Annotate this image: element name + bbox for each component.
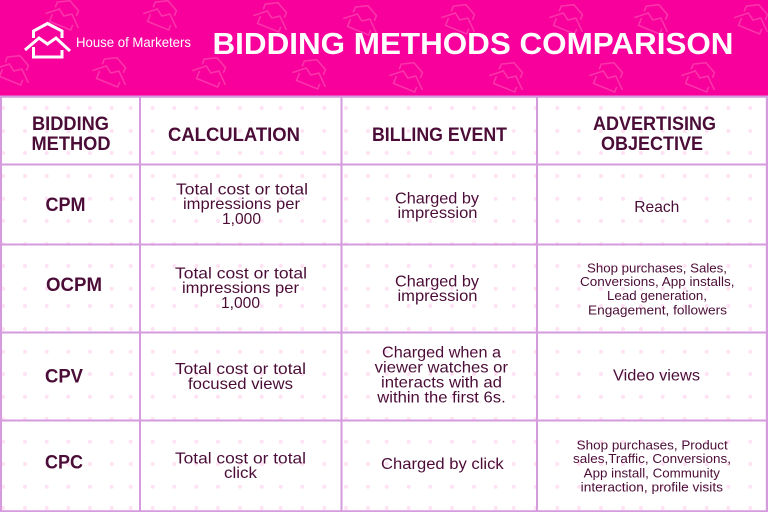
objective: Conversions, App installs,: [580, 274, 734, 289]
objective: Reach: [634, 199, 679, 216]
billing event: Charged by: [395, 190, 479, 207]
billing event: [395, 274, 479, 305]
column heading: bidding method: BIDDING: [32, 113, 109, 135]
calculation: 1,000: [222, 211, 261, 228]
billing event: within the first 6s.: [376, 390, 506, 407]
calculation: click: [224, 465, 258, 482]
title: BIDDING METHODS COMPARISON: [212, 26, 734, 61]
billing event: Charged by click: [381, 456, 505, 473]
column heading: calculation: CALCULATION: [168, 124, 300, 146]
calculation: Total cost or total: [175, 265, 307, 282]
objective: [580, 260, 734, 318]
column heading: bidding method: METHOD: [32, 133, 110, 155]
method name: CPC: [45, 451, 83, 473]
calculation: focused views: [188, 376, 293, 393]
calculation: Total cost or total: [175, 361, 306, 378]
objective: sales,Traffic, Conversions,: [573, 451, 731, 466]
row: CPV: [45, 345, 700, 407]
method name: CPV: [45, 366, 83, 388]
objective: [573, 437, 731, 494]
column heading: advertising objective: OBJECTIVE: [601, 133, 703, 155]
icon: House of Marketers logo: [25, 24, 70, 57]
objective: Lead generation,: [607, 288, 707, 303]
objective: Shop purchases, Sales,: [587, 260, 727, 275]
column heading: billing event: BILLING EVENT: [372, 124, 507, 146]
brand name: House of Marketers: [76, 34, 191, 50]
billing event: Charged when a: [382, 345, 501, 362]
calculation: 1,000: [221, 295, 260, 312]
calculation: Total cost or total: [175, 450, 306, 467]
row: CPC: [45, 437, 731, 494]
method name: CPM: [46, 194, 86, 216]
column heading: advertising objective: ADVERTISING: [593, 113, 716, 135]
objective: App install, Community: [584, 466, 720, 480]
billing event: [395, 190, 479, 222]
calculation: impressions per: [182, 280, 300, 297]
billing event: viewer watches or: [375, 360, 509, 377]
column heading: advertising objective: [593, 113, 716, 155]
billing event: interacts with ad: [381, 375, 502, 392]
method name: OCPM: [46, 274, 102, 296]
calculation: [175, 361, 306, 393]
objective: interaction, profile visits: [581, 480, 724, 494]
calculation: [176, 181, 308, 228]
objective: Engagement, followers: [588, 302, 728, 318]
row: CPM: [46, 181, 679, 228]
billing event: Charged by: [395, 274, 479, 290]
objective: Video views: [613, 368, 700, 385]
calculation: impressions per: [183, 196, 301, 213]
calculation: Total cost or total: [176, 181, 308, 198]
billing event: impression: [398, 288, 478, 305]
billing event: [375, 345, 509, 407]
watermark house pattern: [0, 0, 768, 94]
objective: Shop purchases, Product: [577, 437, 728, 452]
header banner: [0, 0, 768, 95]
row: OCPM: [46, 260, 734, 318]
calculation: [175, 265, 307, 312]
billing event: impression: [398, 205, 478, 222]
calculation: [175, 450, 306, 482]
column heading: bidding method: [32, 113, 110, 155]
